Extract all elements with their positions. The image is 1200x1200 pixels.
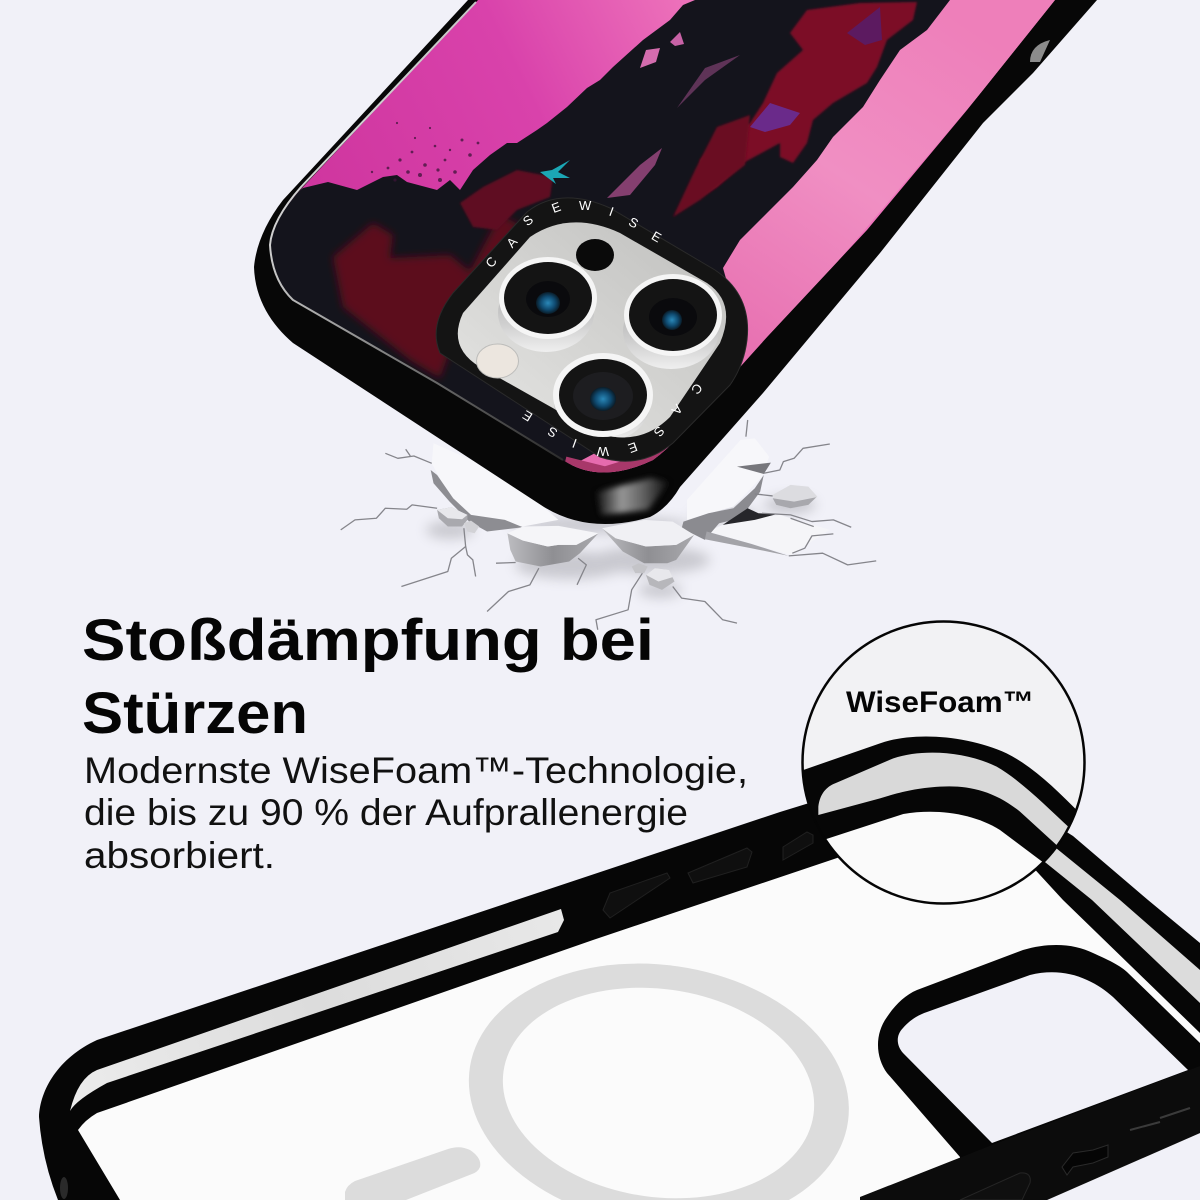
- bumper inner rim highlight: [270, 2, 563, 460]
- mute switch: [783, 832, 813, 860]
- volume button lower: [603, 873, 670, 918]
- bumper corner reflection: [596, 478, 669, 515]
- case port bottom left: [60, 1177, 68, 1199]
- volume button upper: [688, 848, 752, 883]
- camera cutout frame: [878, 945, 1200, 1163]
- heading: [82, 608, 654, 746]
- body text: die bis zu 90 % der Aufprallenergie: [84, 792, 688, 833]
- magsafe ring centre: [489, 968, 828, 1200]
- case black frame: [39, 772, 1200, 1200]
- clear case back: [39, 772, 1200, 1200]
- camera plate: [458, 222, 726, 437]
- phone case black bumper: [254, 0, 1097, 524]
- foam slot left: [70, 909, 564, 1111]
- camera island: [436, 198, 748, 461]
- magsafe ring: [469, 964, 849, 1200]
- microphone hole: [576, 239, 614, 271]
- callout: WiseFoam magnifier: [780, 621, 1085, 910]
- band reflections: [1130, 1108, 1190, 1130]
- phone with pink case: [254, 0, 1097, 524]
- body text: absorbiert.: [84, 835, 275, 876]
- dark red paint, lower left: [333, 215, 520, 378]
- brand text lower: CASEWISE: [520, 380, 706, 459]
- flash: [476, 344, 518, 378]
- cracked floor impact: [341, 420, 876, 630]
- lens right: [623, 274, 722, 369]
- magnifier ring: [802, 622, 1084, 904]
- brand text upper: CASEWISE: [482, 198, 664, 271]
- case artwork: [260, 0, 1060, 490]
- side button: [960, 1173, 1030, 1200]
- speaker port: [1062, 1145, 1108, 1175]
- body text: [84, 750, 748, 876]
- dark red paint, centre: [460, 170, 553, 230]
- clear interior: [78, 825, 1200, 1200]
- magnifier label: WiseFoam™: [846, 686, 1034, 719]
- red paint, upper right: [700, 2, 917, 197]
- heading: Stürzen: [82, 681, 308, 746]
- paint speckles: [371, 122, 479, 182]
- body text: Modernste WiseFoam™-Technologie,: [84, 750, 748, 791]
- magnified corner: [804, 736, 1076, 869]
- side button highlight: [1030, 40, 1050, 62]
- case lower side band: [860, 1066, 1200, 1200]
- lens bottom: [553, 353, 653, 442]
- lens top left: [498, 257, 597, 352]
- camera cutout opening: [898, 972, 1188, 1143]
- heading: Stoßdämpfung bei: [82, 608, 654, 673]
- magsafe alignment pill: [345, 1147, 480, 1200]
- foam slot right: [1030, 835, 1200, 1003]
